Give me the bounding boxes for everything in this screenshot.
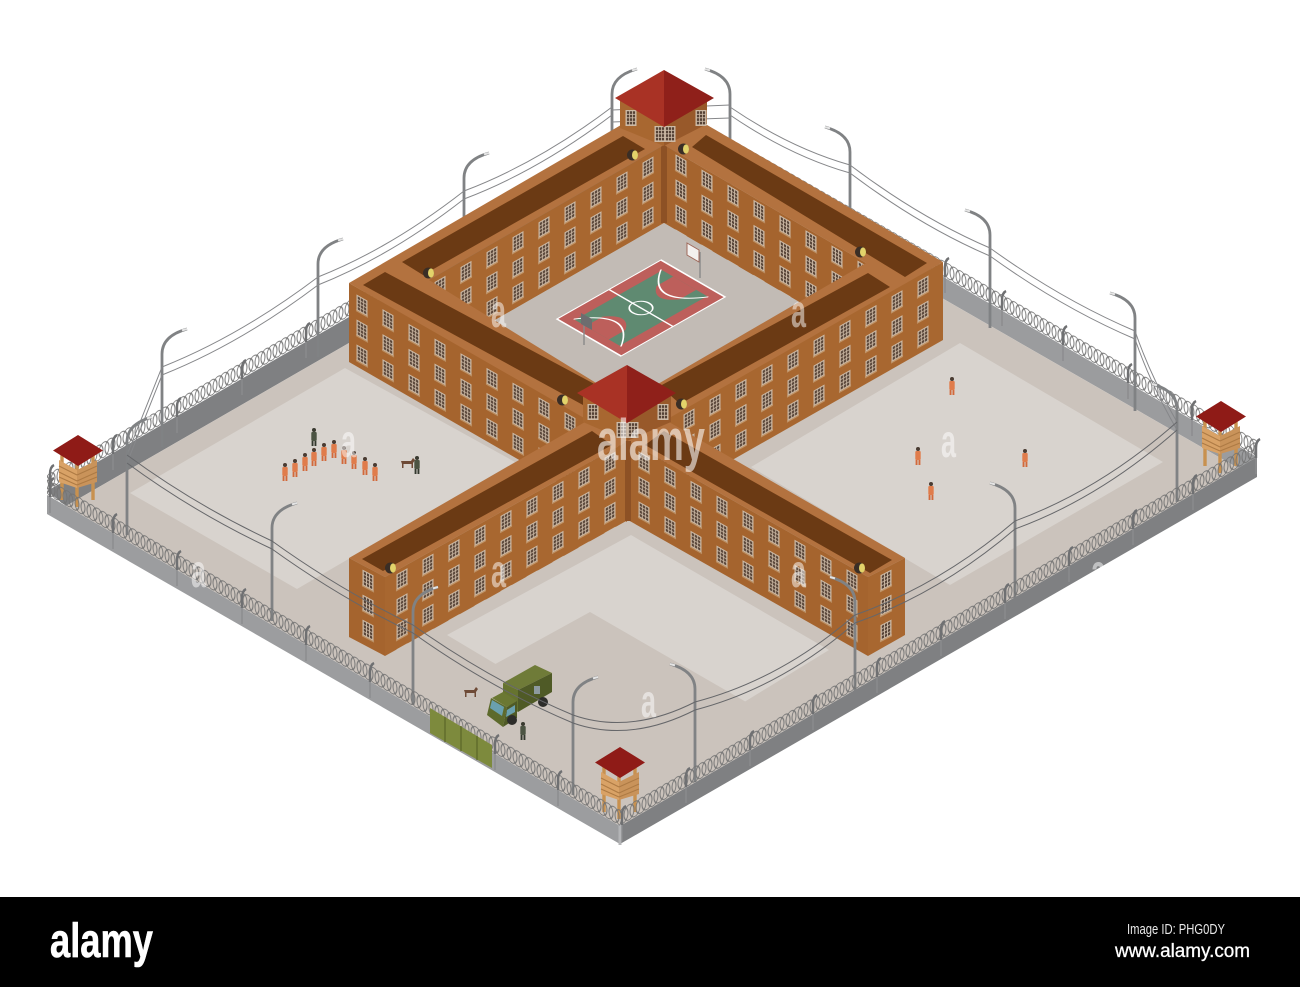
image id: Image ID: PHG0DY (1127, 921, 1225, 938)
vehicle yard patch (430, 612, 760, 800)
watch tower: right (1196, 401, 1246, 473)
basketball hoop: far (687, 243, 700, 278)
watermark: small letters: a (791, 545, 806, 597)
rear tower body (620, 100, 707, 146)
outer wall: south-east wing (627, 262, 943, 520)
razor wire: front walls (47, 440, 1257, 826)
south cross wing: right long wall (628, 441, 868, 656)
guard at truck (520, 722, 526, 740)
overhead wires: front (127, 422, 1177, 731)
footer band (0, 897, 1300, 987)
courtyard floor (429, 223, 866, 480)
watermark: small letters: a (341, 415, 356, 467)
basketball hoop: near (581, 313, 592, 345)
website: www.alamy.com (1114, 941, 1250, 962)
watermark: small letters: a (491, 545, 506, 597)
recessed roof: south-east wing (660, 273, 890, 404)
watermark: small letters: a (941, 415, 956, 467)
guard dog and handler (401, 456, 420, 474)
centre tower roof (577, 365, 676, 423)
front perimeter walls (47, 457, 1257, 845)
yard pad: left (130, 368, 515, 589)
military truck (487, 665, 552, 727)
watermark: small letters: a (641, 675, 656, 727)
basketball court (557, 260, 725, 356)
south cross wing: left arm top (349, 422, 628, 577)
back perimeter walls (47, 124, 1257, 506)
watermark: small letters: a (1091, 545, 1106, 597)
yard pad: front (447, 535, 829, 758)
inmates exercising in a line (282, 440, 378, 481)
south cross wing: left end wall (349, 558, 385, 656)
fence posts: back walls (50, 258, 1196, 500)
recessed roof: south-west wing (363, 272, 600, 405)
south cross wing: recessed roof left (362, 431, 612, 571)
inner wall: north-east (664, 145, 866, 341)
roof floodlights (385, 144, 866, 574)
centre tower body (583, 396, 671, 441)
inmates: right yard (915, 377, 1028, 500)
ring roof parapet (349, 100, 943, 445)
south cross wing: recessed roof right (645, 431, 892, 573)
inner wall: north-west (429, 145, 664, 358)
yard pad: right (751, 343, 1163, 585)
rear tower roof (615, 70, 714, 127)
watermark: small letters (191, 285, 1106, 727)
main cell block (349, 70, 943, 656)
guard dog at vehicle (464, 687, 478, 697)
prison gate (430, 708, 492, 768)
guard: left yard (311, 428, 317, 446)
south cross wing: right end wall (868, 558, 905, 656)
outer wall: south-west wing (349, 283, 627, 522)
overhead wires: back (127, 105, 1177, 463)
footer logo: alamy (50, 915, 153, 968)
watermark: centre logo: alamy (597, 408, 705, 473)
watch tower: front (595, 747, 645, 819)
courtyard seam pilaster (661, 145, 667, 223)
street lamps behind the building (162, 69, 1135, 447)
street lamps in front of the building (127, 384, 1177, 795)
watermark: small letters: a (791, 285, 806, 337)
watch tower: left (53, 435, 103, 507)
recessed roof: north-east wing (692, 135, 927, 277)
fence posts: front walls (50, 439, 1260, 841)
south cross wing: right arm top (628, 422, 905, 577)
south cross wing: left long wall (385, 441, 628, 656)
prison yard ground (66, 150, 1238, 826)
recessed roof: north-west wing (402, 136, 645, 275)
razor wire: back walls (47, 106, 1257, 491)
watermark: small letters: a (491, 285, 506, 337)
watermark: small letters: a (191, 545, 206, 597)
centre seam (625, 441, 631, 521)
